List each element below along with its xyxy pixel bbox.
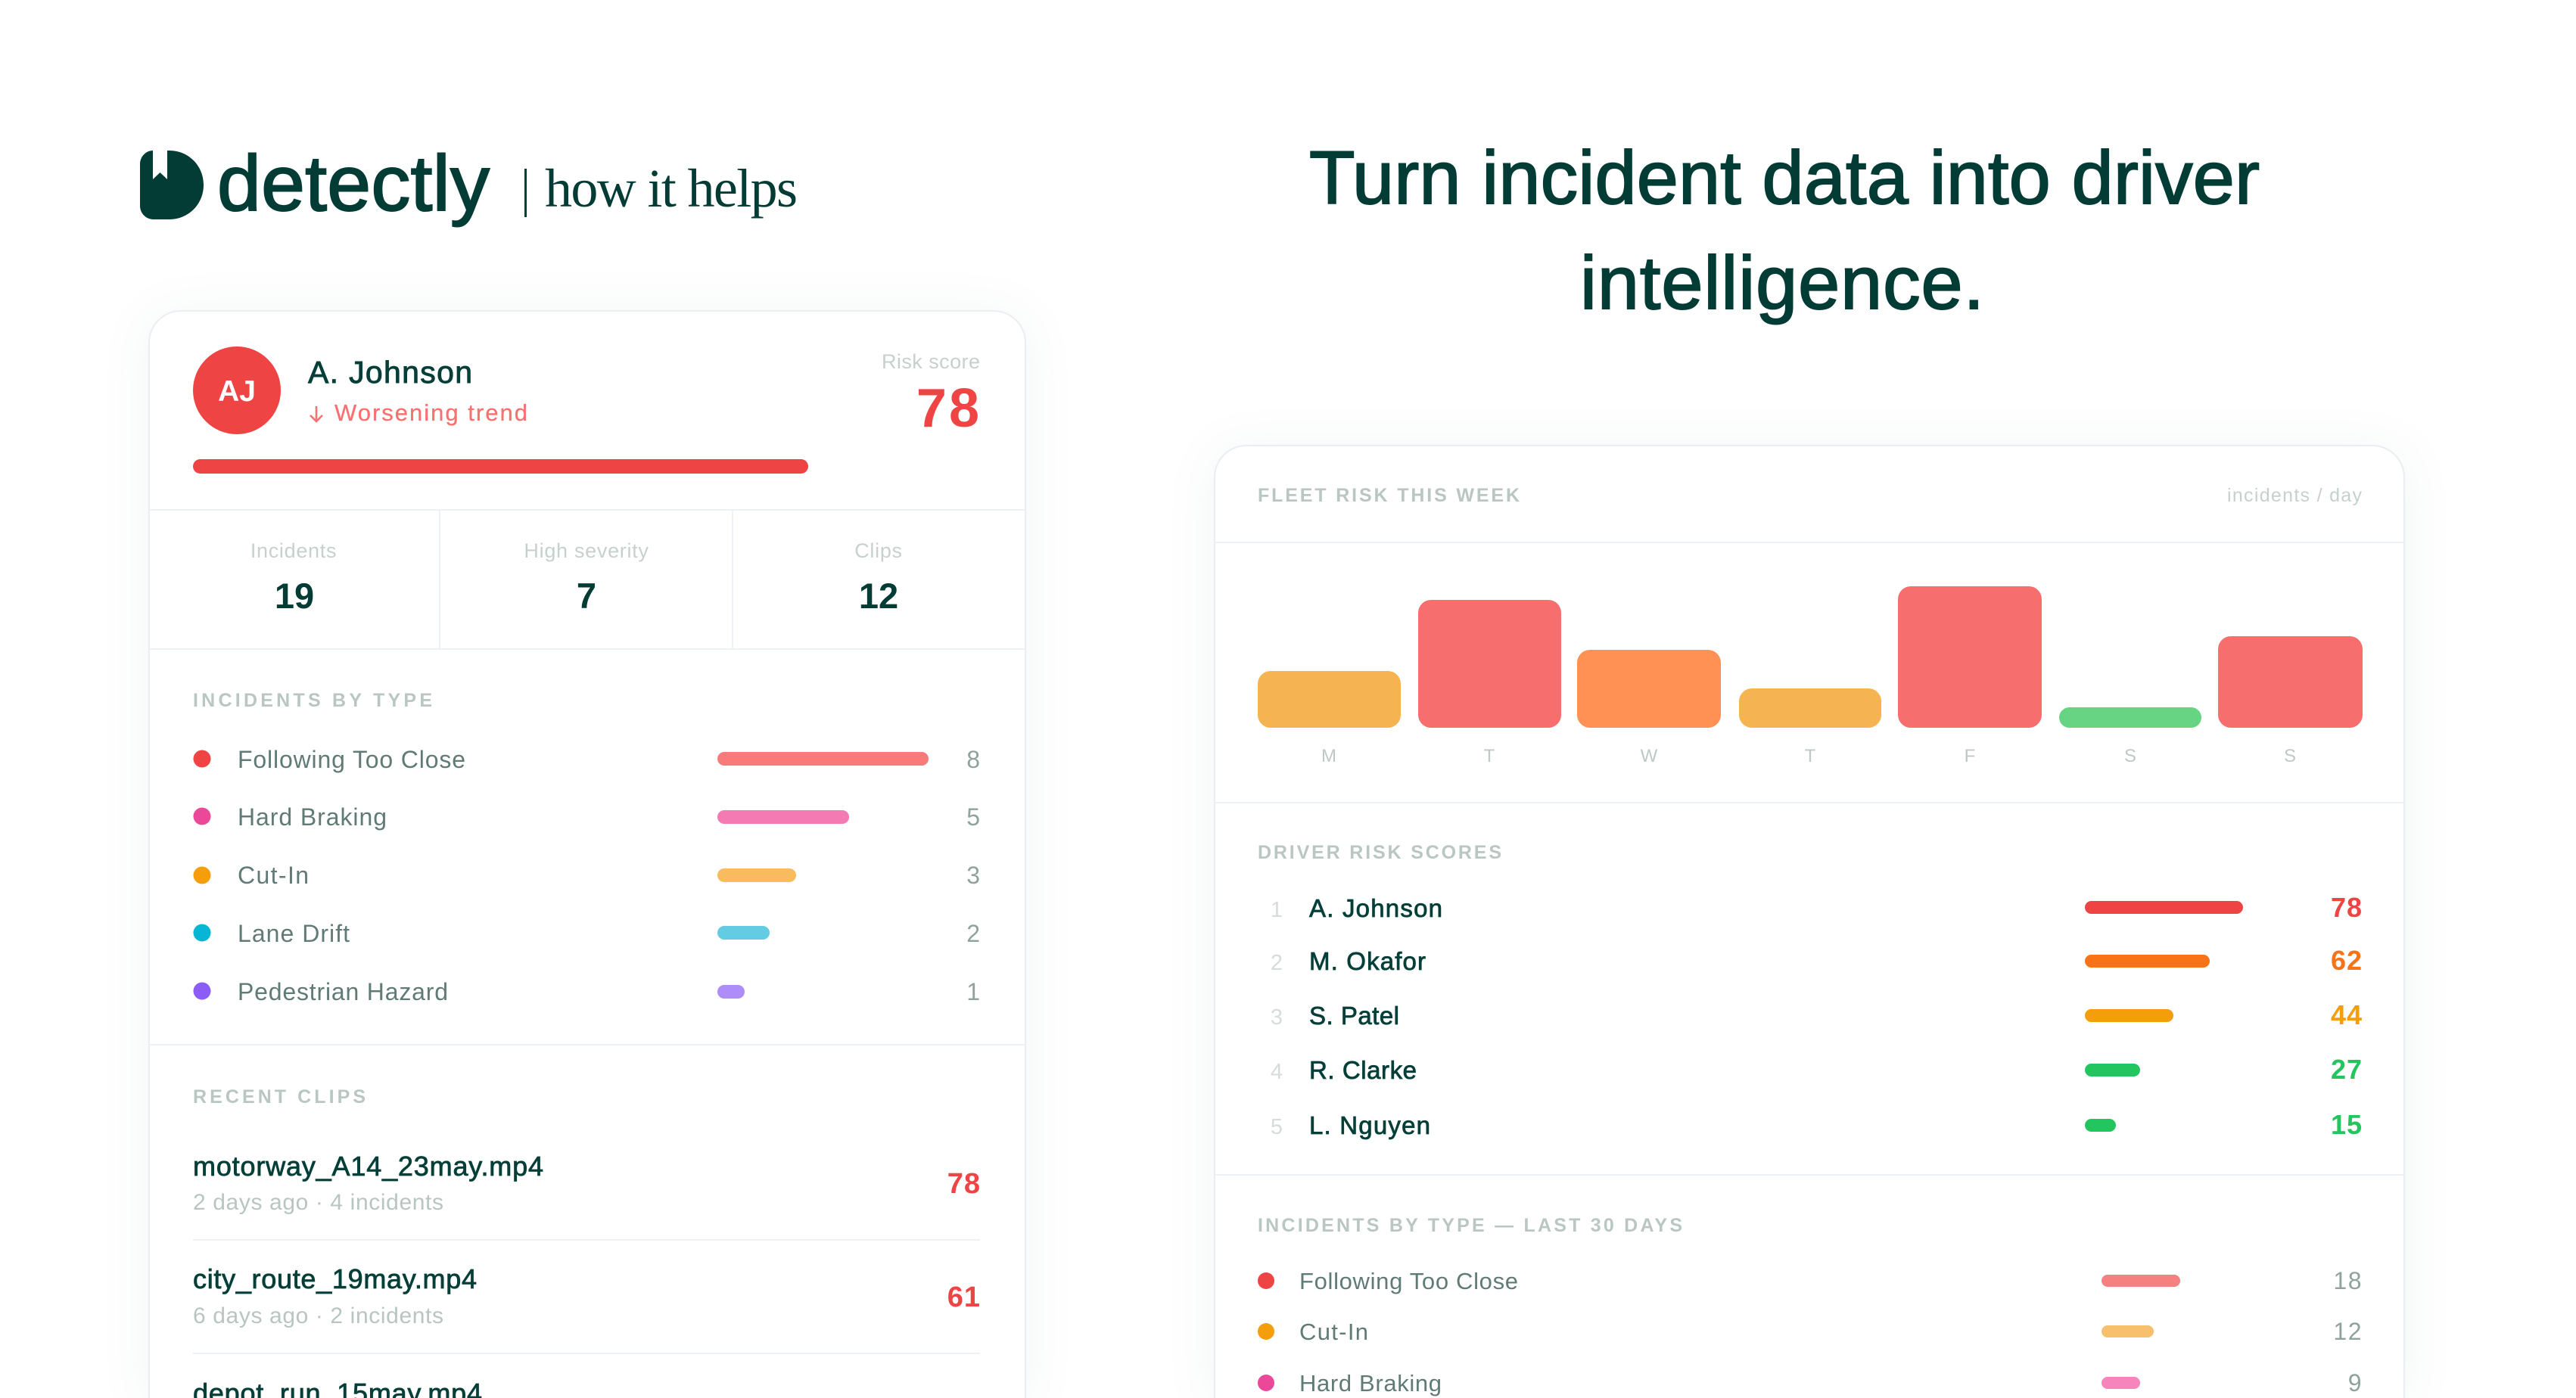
bar chart: fleet risk this week: W	[1641, 746, 1658, 766]
stat: incidents: Incidents	[250, 539, 337, 562]
driver row: S. Patel: S. Patel	[1309, 1002, 1399, 1030]
driver row: S. Patel: 3	[1271, 1005, 1283, 1030]
row: pedestrian hazard: 1	[966, 978, 980, 1005]
row: hard braking: 9	[2348, 1369, 2363, 1396]
driver name: A. Johnson	[308, 355, 472, 390]
trend label: Worsening trend	[334, 399, 527, 426]
panel: fleet dashboard card	[1215, 446, 2404, 1398]
panel: driver profile card	[149, 311, 1025, 1398]
section heading: recent clips: RECENT CLIPS	[193, 1086, 366, 1108]
driver row: L. Nguyen: 15	[2331, 1109, 2363, 1140]
driver row: L. Nguyen: L. Nguyen	[1309, 1111, 1430, 1139]
driver row: M. Okafor: M. Okafor	[1309, 947, 1426, 975]
driver row: R. Clarke: R. Clarke	[1309, 1056, 1417, 1084]
row: following too close: 18	[2333, 1267, 2363, 1294]
row: following too close: Following Too Close	[1299, 1268, 1518, 1294]
title: intelligence.	[1580, 241, 1984, 325]
row: hard braking	[1258, 1369, 2363, 1396]
risk score: 78	[916, 378, 982, 439]
list: incidents by type last 30 days	[1258, 1267, 2363, 1396]
logo wordmark: detectly	[217, 140, 490, 228]
bar chart: fleet risk this week	[1258, 586, 2363, 766]
bar chart: fleet risk this week: M	[1321, 746, 1336, 766]
bar chart: fleet risk this week: S	[2124, 746, 2136, 766]
stat: high severity: High severity	[524, 539, 649, 562]
driver row: R. Clarke: 4	[1271, 1060, 1283, 1084]
row: pedestrian hazard: Pedestrian Hazard	[238, 978, 448, 1005]
tagline: how it helps: how it helps	[545, 158, 798, 219]
list: incidents by type	[194, 746, 980, 1005]
driver row: R. Clarke: 27	[2331, 1054, 2363, 1085]
fleet chart header: FLEET RISK THIS WEEK	[1258, 485, 1520, 506]
row: following too close: Following Too Close	[238, 746, 465, 773]
row: hard braking: Hard Braking	[1299, 1370, 1442, 1396]
row: hard braking	[194, 803, 980, 831]
stat: high severity	[524, 539, 649, 616]
list: driver risk scores	[1271, 892, 2363, 1140]
row: lane drift	[194, 920, 980, 947]
driver row: L. Nguyen: 5	[1271, 1115, 1283, 1139]
section heading: incidents by type: INCIDENTS BY TYPE	[193, 690, 432, 711]
driver row: A. Johnson: 78	[2331, 892, 2363, 923]
driver header	[193, 346, 982, 474]
clip: city route	[193, 1263, 981, 1328]
clip: city route: 61	[947, 1282, 981, 1313]
clip: city route: 6 days ago · 2 incidents	[193, 1303, 443, 1328]
driver row: M. Okafor: 2	[1271, 951, 1283, 975]
stat: incidents	[250, 539, 337, 616]
row: pedestrian hazard	[194, 978, 980, 1005]
section heading: driver risk scores: DRIVER RISK SCORES	[1258, 842, 1501, 863]
icon: bookmark D mark	[140, 151, 204, 219]
icon: avatar	[193, 346, 281, 434]
title	[1309, 135, 2260, 325]
stat: clips	[854, 539, 903, 616]
row: cut-in	[1258, 1318, 2363, 1345]
clip: motorway	[193, 1151, 981, 1215]
row: lane drift: Lane Drift	[238, 920, 350, 947]
bar chart: fleet risk this week: S	[2284, 746, 2296, 766]
row: following too close	[194, 746, 980, 773]
row: following too close: 8	[966, 746, 980, 773]
bar chart: fleet risk this week: F	[1965, 746, 1975, 766]
stat: high severity: 7	[577, 576, 596, 616]
row: following too close	[1258, 1267, 2363, 1294]
row: lane drift: 2	[966, 920, 980, 947]
driver row: A. Johnson	[1271, 892, 2363, 923]
bar chart: fleet risk this week: T	[1484, 746, 1495, 766]
row: hard braking: Hard Braking	[238, 803, 387, 831]
driver row: L. Nguyen	[1271, 1109, 2363, 1140]
fleet chart header: incidents / day	[2227, 485, 2363, 506]
fleet chart header	[1258, 485, 2363, 506]
risk score: Risk score	[882, 350, 980, 373]
row: cut-in: Cut-In	[238, 862, 309, 889]
row: cut-in: Cut-In	[1299, 1319, 1368, 1345]
stat: incidents: 19	[275, 576, 314, 616]
stat: clips: 12	[859, 576, 898, 616]
section heading: incidents by type last 30 days: INCIDENTS BY TYPE — LAST 30 DAYS	[1258, 1215, 1682, 1236]
bar chart: fleet risk this week: T	[1805, 746, 1816, 766]
driver row: A. Johnson: A. Johnson	[1309, 894, 1442, 922]
icon: avatar: AJ	[218, 375, 256, 408]
driver row: R. Clarke	[1271, 1054, 2363, 1085]
clip: city route: city_route_19may.mp4	[193, 1263, 477, 1294]
logo: detectly	[140, 140, 490, 228]
clip: motorway: 2 days ago · 4 incidents	[193, 1190, 443, 1215]
title: Turn incident data into driver	[1309, 135, 2260, 219]
risk score	[882, 350, 982, 439]
row: hard braking: 5	[966, 803, 980, 831]
stat: clips: Clips	[854, 539, 903, 562]
row: cut-in: 12	[2333, 1318, 2363, 1345]
clip: motorway: 78	[947, 1168, 981, 1200]
driver row: S. Patel	[1271, 999, 2363, 1030]
row: cut-in	[194, 862, 980, 889]
driver row: M. Okafor	[1271, 945, 2363, 976]
driver row: S. Patel: 44	[2331, 999, 2363, 1030]
driver row: A. Johnson: 1	[1271, 898, 1283, 922]
clip: motorway: motorway_A14_23may.mp4	[193, 1151, 543, 1182]
row: cut-in: 3	[966, 862, 980, 889]
driver row: M. Okafor: 62	[2331, 945, 2363, 976]
risk progress bar	[193, 459, 808, 474]
